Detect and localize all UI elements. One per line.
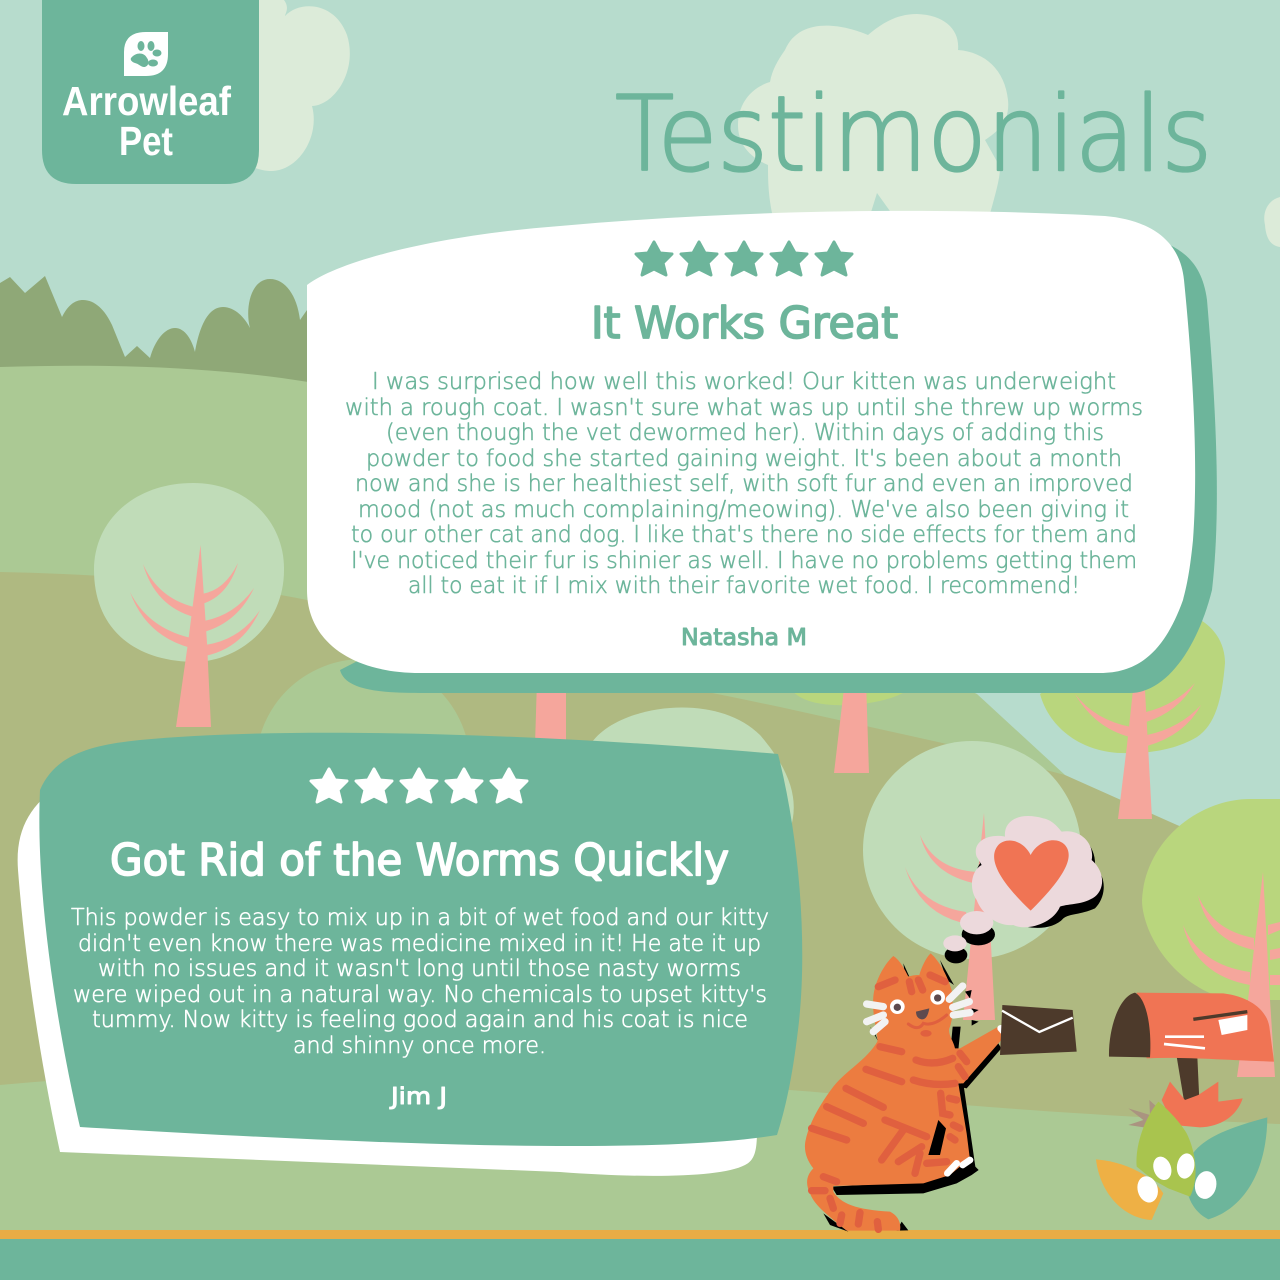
background clouds	[240, 0, 1280, 247]
heart	[994, 840, 1069, 911]
card shadow	[18, 785, 757, 1176]
review text: to our other cat and dog. I like that's there no side effects for them and	[351, 520, 1137, 548]
tree: far right lime	[1040, 610, 1225, 819]
star rating	[311, 769, 527, 802]
whiskers	[867, 986, 970, 1032]
card body	[39, 733, 802, 1146]
panel: testimonial 1	[307, 211, 1217, 693]
letter envelope	[1000, 1005, 1077, 1055]
review text	[71, 903, 769, 1059]
eyes	[890, 999, 905, 1014]
footer accent line	[0, 1230, 1280, 1239]
review text: now and she is her healthiest self, with soft fur and even an improved	[355, 469, 1133, 497]
logo panel	[42, 0, 259, 184]
logo wordmark second line: Pet	[119, 118, 173, 164]
heading: Got Rid of the Worms Quickly	[110, 835, 729, 886]
heading: It Works Great	[591, 298, 898, 349]
star rating	[636, 242, 852, 275]
tree: right lime	[1142, 799, 1280, 1077]
cat	[805, 953, 1007, 1232]
icon: leaf with paw	[124, 32, 168, 76]
tree: left	[94, 483, 284, 727]
gap between body and leg	[928, 1120, 946, 1155]
review text: with a rough coat. I wasn't sure what was up until she threw up worms	[345, 393, 1143, 421]
white paw prints	[1135, 1152, 1219, 1205]
title: Testimonials	[615, 75, 1212, 195]
tree: centre right	[792, 680, 907, 773]
footer stripe	[0, 1230, 1280, 1280]
illustration: cat, letter and mailbox	[805, 816, 1274, 1232]
reviewer name: Jim J	[389, 1084, 447, 1110]
thought bubble with heart	[943, 816, 1104, 963]
card body	[307, 211, 1195, 673]
review text: This powder is easy to mix up in a bit of wet food and our kitty	[71, 903, 769, 931]
review text: I was surprised how well this worked! Our kitten was underweight	[372, 367, 1116, 395]
review text: I've noticed their fur is shinier as well. I have no problems getting them	[351, 546, 1137, 574]
card shadow	[340, 245, 1217, 693]
review text: were wiped out in a natural way. No chemicals to upset kitty's	[73, 980, 767, 1008]
light green hill	[0, 366, 1065, 1100]
distant tree line	[0, 276, 310, 400]
tree: centre pale	[535, 680, 794, 830]
review text: (even though the vet dewormed her). Within days of adding this	[386, 418, 1104, 446]
review text: didn't even know there was medicine mixed in it! He ate it up	[78, 929, 761, 957]
review text: and shinny once more.	[293, 1031, 546, 1059]
flower and leaves	[1096, 1082, 1267, 1220]
review text: with no issues and it wasn't long until those nasty worms	[98, 954, 741, 982]
review text: powder to food she started gaining weight. It's been about a month	[366, 444, 1122, 472]
logo wordmark: Arrowleaf	[62, 78, 231, 124]
paws	[947, 1028, 1005, 1173]
panel: testimonial 2	[18, 733, 802, 1176]
tree: pale behind cat	[863, 741, 1081, 1020]
mailbox	[1109, 993, 1274, 1107]
reviewer name: Natasha M	[681, 625, 807, 651]
review text: mood (not as much complaining/meowing). We've also been giving it	[358, 495, 1129, 523]
review text	[345, 367, 1143, 599]
review text: tummy. Now kitty is feeling good again and his coat is nice	[92, 1005, 748, 1033]
sage mound	[256, 659, 470, 871]
foreground hill	[0, 1072, 1280, 1240]
review text: all to eat it if I mix with their favorite wet food. I recommend!	[408, 571, 1080, 599]
olive hill	[0, 572, 1280, 1240]
